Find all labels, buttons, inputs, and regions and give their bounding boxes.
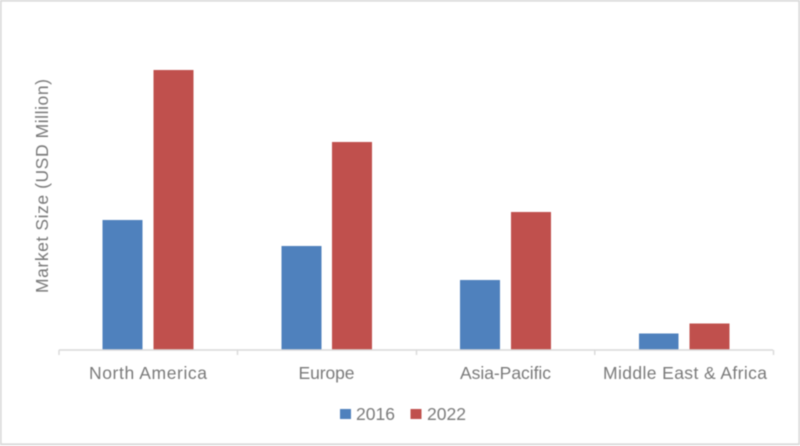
bars: Europe — [282, 142, 372, 350]
bars: Middle East & Africa — [639, 324, 730, 350]
y-axis title: Market Size (USD Million) — [32, 79, 52, 293]
legend: 2022 — [427, 404, 466, 424]
x-axis — [59, 350, 774, 355]
bars: North America — [102, 70, 194, 350]
legend — [340, 404, 466, 424]
x-axis category labels: North America — [89, 363, 207, 383]
x-axis category labels: Asia-Pacific — [460, 363, 551, 383]
legend: 2016 — [356, 404, 395, 424]
x-axis category labels — [89, 363, 767, 383]
x-axis category labels: Middle East & Africa — [603, 363, 767, 383]
x-axis category labels: Europe — [298, 363, 354, 383]
bars: Asia-Pacific — [460, 212, 551, 350]
